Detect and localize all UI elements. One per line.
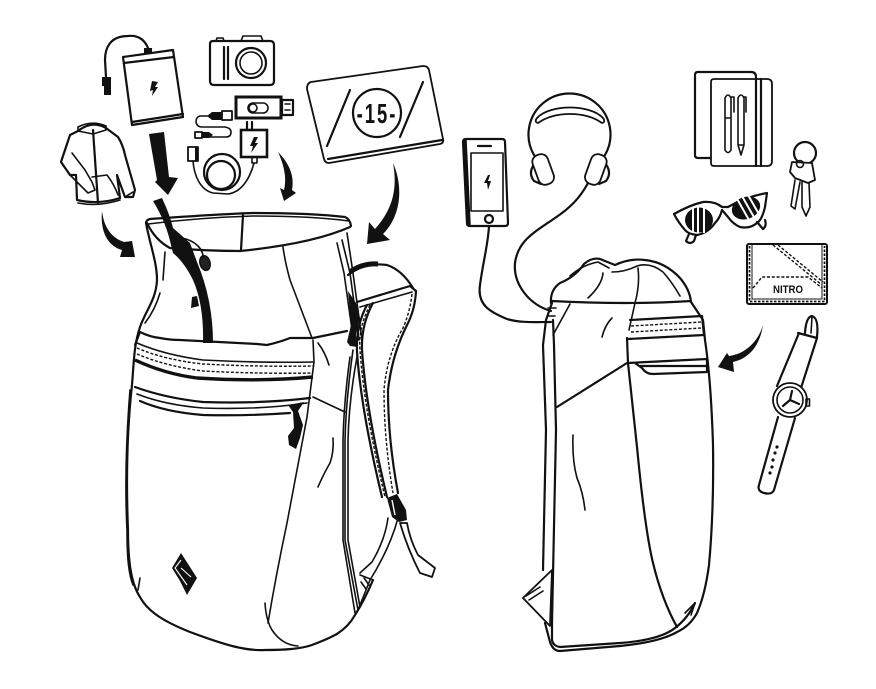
icon: lightning bolt	[150, 81, 158, 96]
icon: jacket	[61, 123, 135, 204]
phone cable	[480, 226, 551, 322]
icon: smartphone	[463, 139, 508, 226]
label: NITRO: NITRO	[773, 284, 803, 296]
inner strap	[241, 215, 243, 250]
strap toggle	[198, 254, 212, 272]
strap buckle upper	[347, 291, 360, 347]
rim	[146, 213, 351, 226]
icon: power bank with cable	[102, 36, 183, 125]
side seams	[337, 233, 362, 340]
icon: notebooks and pens	[695, 72, 772, 166]
strap clip	[191, 296, 199, 308]
icon: logo diamond	[172, 553, 197, 595]
pack body outline	[127, 223, 373, 650]
arrow: cables into backpack	[278, 152, 296, 201]
strap buckle lower	[387, 494, 407, 522]
icon: wall charger with coiled cable	[188, 122, 267, 194]
icon: keys	[790, 142, 816, 216]
black webbing strap	[153, 198, 213, 343]
icon: wallet	[747, 244, 827, 304]
headphone cable	[515, 183, 588, 311]
icon: sunglasses	[674, 193, 767, 243]
icon: tablet sleeve with 15 inch label	[307, 66, 443, 163]
icon: headphones	[515, 93, 611, 311]
icon: USB stick	[236, 97, 293, 118]
backpack: open front view	[126, 198, 435, 650]
arrow: accessories into back pocket	[718, 325, 763, 372]
drawstring top	[551, 259, 691, 303]
icon: camera	[210, 36, 274, 85]
icon: wristwatch	[759, 316, 817, 494]
front pocket zip	[135, 387, 310, 402]
back panel outline	[545, 302, 713, 651]
zip band	[140, 331, 347, 345]
collar band	[628, 316, 704, 339]
icon: USB cable	[195, 111, 232, 138]
zip puller	[288, 402, 304, 449]
arrow: power bank into backpack	[149, 132, 178, 195]
backpack: back view	[523, 259, 713, 651]
label: -15-: -15-	[357, 99, 397, 130]
shoulder strap	[348, 264, 435, 610]
arrow: jacket into backpack	[102, 211, 135, 257]
arrow: tablet into backpack	[367, 163, 399, 244]
bottom flap	[523, 570, 552, 626]
